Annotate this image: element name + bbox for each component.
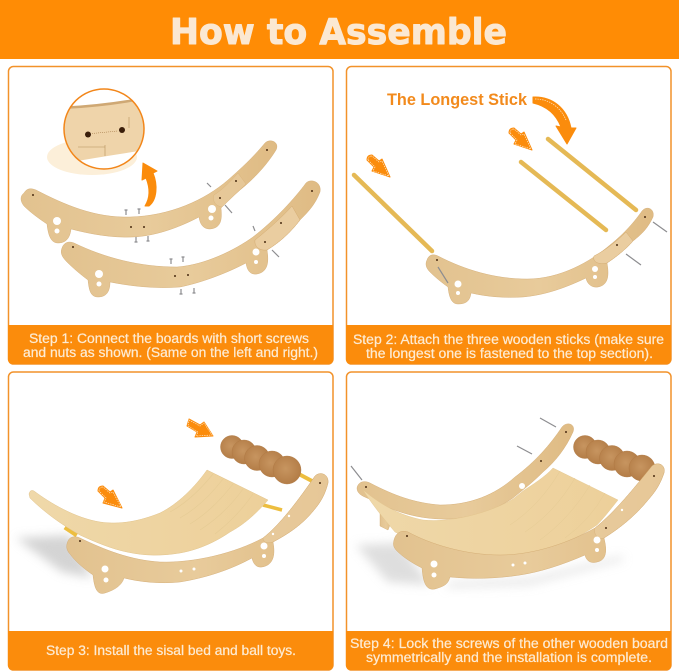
caption: step 2 bbox=[346, 325, 671, 364]
caption: step 2: Step 2: Attach the three wooden sticks (make sure bbox=[353, 332, 664, 347]
caption: step 3 bbox=[8, 631, 333, 670]
shadow bbox=[16, 535, 92, 578]
panel: step 3 bbox=[8, 372, 333, 670]
screws bbox=[124, 183, 279, 294]
caption: step 1 bbox=[8, 325, 333, 364]
arrow: middle stick bbox=[509, 128, 532, 150]
header banner bbox=[0, 0, 679, 59]
label: the longest stick: The Longest Stick bbox=[387, 91, 528, 109]
board: upper bbox=[21, 141, 277, 243]
caption: step 3: Step 3: Install the sisal bed and ball toys. bbox=[46, 643, 296, 658]
panel: step 2 bbox=[346, 66, 671, 364]
caption: step 2: the longest one is fastened to the top section). bbox=[366, 346, 653, 361]
shadow bbox=[356, 543, 430, 585]
ball toys bbox=[574, 436, 655, 481]
front board bbox=[393, 464, 664, 589]
board bbox=[426, 208, 653, 304]
sisal bed bbox=[29, 470, 268, 555]
caption: step 1: and nuts as shown. (Same on the left and right.) bbox=[23, 345, 318, 360]
arrow: ball toy bbox=[187, 419, 213, 437]
title: How to Assemble bbox=[170, 12, 507, 53]
screws bbox=[351, 418, 556, 480]
caption: step 4 bbox=[346, 631, 671, 670]
back board bbox=[357, 424, 574, 530]
arrow: curved up to detail bbox=[142, 163, 157, 206]
panel: step 4 bbox=[346, 372, 671, 670]
ball toys bbox=[220, 436, 312, 484]
arrow: left stick bbox=[367, 155, 390, 177]
screws bbox=[438, 222, 667, 283]
arrow: bed bbox=[98, 486, 122, 508]
wooden board bbox=[67, 474, 328, 594]
icon: magnifier detail of board joint bbox=[47, 89, 146, 175]
sticks under bed bbox=[65, 505, 282, 535]
caption: step 4: Step 4: Lock the screws of the other wooden board bbox=[350, 636, 668, 651]
arrow: curved to longest stick bbox=[533, 97, 576, 144]
wooden sticks bbox=[354, 139, 636, 251]
board: lower bbox=[61, 181, 320, 297]
sisal bed bbox=[363, 468, 618, 556]
caption: step 1: Step 1: Connect the boards with short screws bbox=[29, 331, 309, 346]
panel: step 1 bbox=[8, 66, 333, 364]
caption: step 4: symmetrically and the installation is complete. bbox=[366, 650, 652, 665]
